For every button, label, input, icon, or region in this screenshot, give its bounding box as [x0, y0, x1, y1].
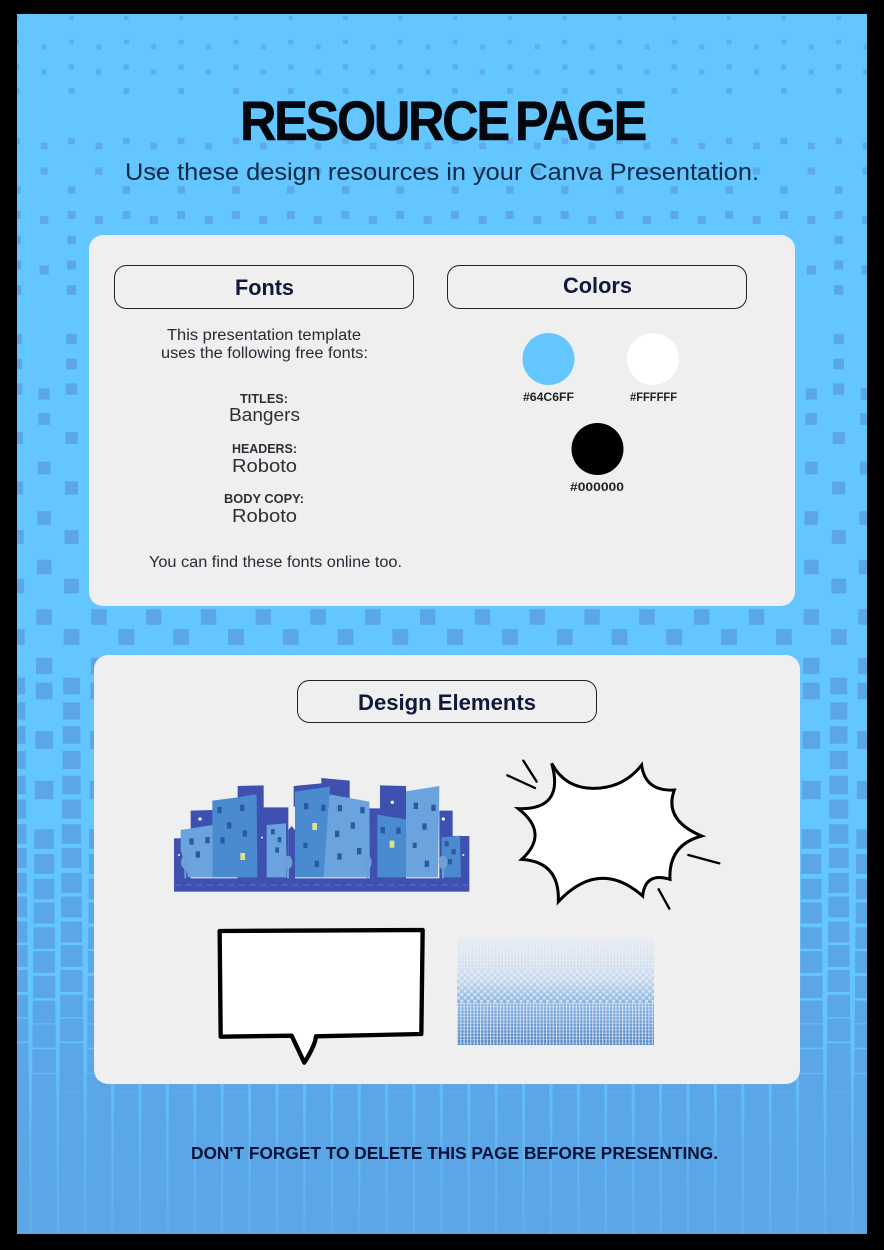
illustration: speech bubble	[220, 930, 423, 1063]
font entry: headers	[232, 442, 297, 476]
heading: design elements: Design Elements	[358, 690, 536, 715]
text block: font introduction: uses the following free fonts:	[161, 345, 368, 362]
title: RESOURCE PAGE	[240, 89, 646, 152]
font entry: titles: TITLES:	[240, 392, 288, 406]
font entry: body copy: Roboto	[232, 505, 297, 526]
swatch: blue: #64C6FF	[523, 392, 574, 404]
swatch: blue	[522, 333, 574, 404]
font entry: titles: Bangers	[229, 404, 300, 425]
panel: fonts and colors	[89, 235, 795, 606]
heading: colors: Colors	[563, 273, 632, 298]
panel: design elements	[94, 655, 800, 1084]
swatch: white: #FFFFFF	[630, 392, 677, 404]
heading: fonts	[114, 266, 414, 308]
illustration: comic burst	[507, 761, 719, 909]
font entry: body copy: BODY COPY:	[224, 492, 304, 506]
heading: colors	[448, 266, 746, 308]
closing reminder: DON'T FORGET TO DELETE THIS PAGE BEFORE PRESENTING.	[191, 1143, 718, 1163]
subtitle: Use these design resources in your Canva Presentation.	[125, 159, 759, 186]
font entry: headers: HEADERS:	[232, 442, 297, 456]
text block: font introduction: This presentation template	[167, 327, 361, 344]
illustration: city skyline	[174, 778, 469, 892]
font entry: titles	[229, 392, 300, 425]
text block: fonts note: You can find these fonts online too.	[149, 554, 402, 571]
text block: font introduction	[161, 327, 368, 362]
heading: design elements	[298, 680, 596, 722]
swatch: black: #000000	[570, 482, 624, 494]
swatch: black	[570, 423, 624, 494]
font entry: body copy	[224, 492, 304, 526]
illustration: halftone swatch	[457, 937, 654, 1045]
font entry: headers: Roboto	[232, 455, 297, 476]
heading: fonts: Fonts	[235, 275, 294, 300]
swatch: white	[627, 333, 679, 404]
